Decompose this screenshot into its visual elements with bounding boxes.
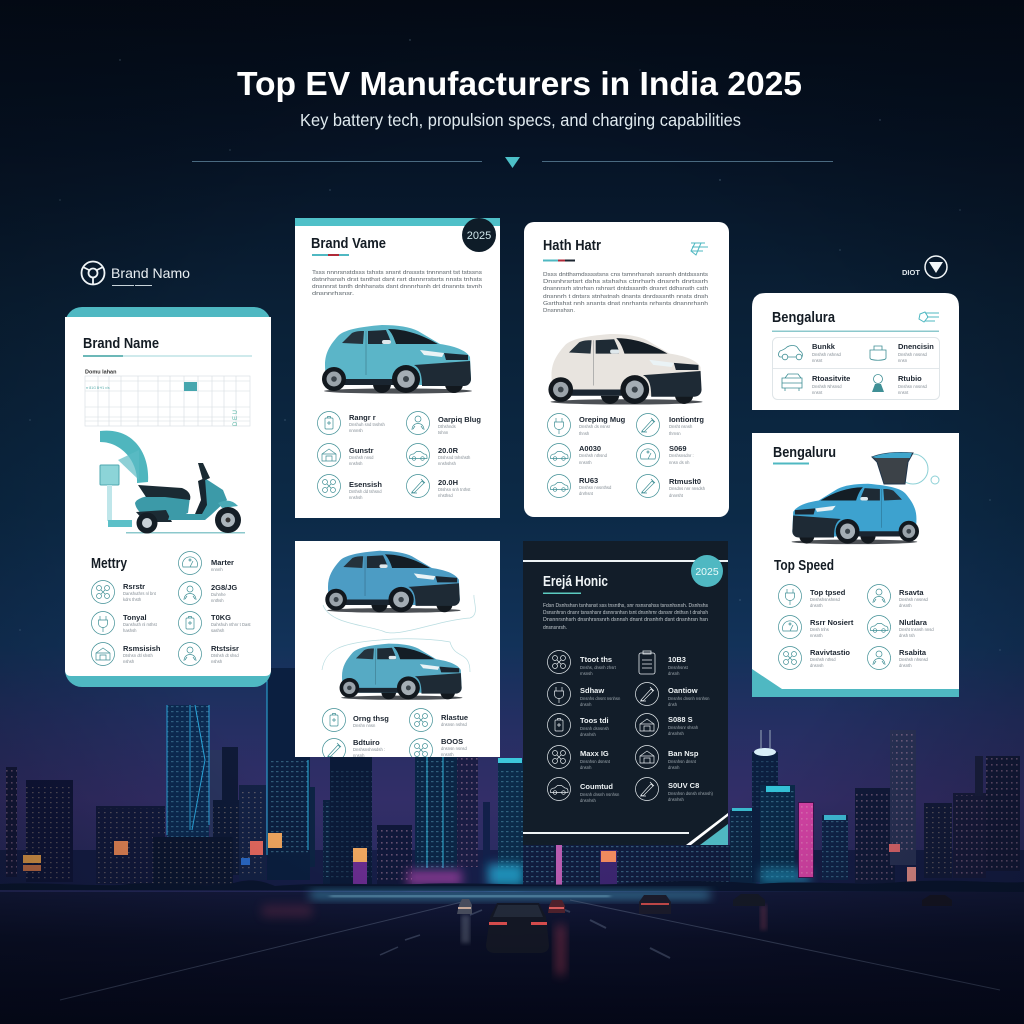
- spec item: Oarpiq Blug: [406, 412, 481, 435]
- spec item: Rsrstr: [92, 580, 157, 604]
- spec item: T0KG: T0KG: [211, 613, 231, 622]
- reflections: [262, 905, 312, 917]
- spec item: Maxx IG: [548, 746, 611, 770]
- panel: card 6 two cars: [295, 541, 500, 762]
- spec item: BOOS: [409, 738, 467, 757]
- spec item: Sdhaw: Dnsnhs dnsnt nsnhsn: [580, 696, 621, 701]
- tree line: [0, 880, 1024, 892]
- paragraph: Dnsnnshsn.: [543, 308, 575, 314]
- badge: 2025: 2025: [467, 230, 491, 242]
- spec item: Tonyal: [92, 612, 158, 634]
- spec item: Tonyal: Danshuth nl mthst: [123, 622, 158, 627]
- spec item: Rtoasitvite: Rtoasitvite: [812, 374, 850, 383]
- spec item: Dnencisin: Dnshsh nnsnsd: [898, 352, 928, 357]
- paragraph: Fdsn Dsnhshsn tsnhsnst sss tnsnths, snr nsnsnshss tsnsnhsnsh. Dsnhshs: [543, 603, 708, 609]
- spec item: S069: S069: [669, 444, 687, 453]
- spec item: Rsrr Nosiert: [778, 616, 854, 638]
- paragraph: dnsnsnrsh.: [543, 625, 567, 631]
- spec item: 20.0R: 20.0R: [438, 446, 459, 455]
- spec item: Bunkk: [778, 342, 842, 363]
- spec item: Rsavta: Dnshsh nnsnsd: [899, 597, 929, 602]
- heading: Bengalura: [772, 310, 836, 326]
- spec item: 2G8/JG: 2G8/JG: [211, 583, 237, 592]
- spec item: Oantiow: Oantiow: [668, 686, 698, 695]
- spec item: Sdhaw: [548, 682, 621, 707]
- spec item: Rsrstr: Danshuthrs nl bnt: [123, 591, 157, 596]
- spec item: Maxx IG: Dnsnhsn dsnsnt: [580, 759, 611, 764]
- spec item: Oreping Mug: Oreping Mug: [579, 415, 626, 424]
- spec item: Esensish: nnshsh: [349, 495, 363, 500]
- spec item: Ttoot ths: [548, 650, 617, 676]
- spec item: A0030: [548, 444, 608, 466]
- logo: DIOT: [902, 256, 947, 278]
- spec item: Rsmsisish: nshsh: [123, 659, 135, 664]
- spec item: Bunkk: Bunkk: [812, 342, 836, 351]
- spec item: Rtubio: Dnshsn nnsnsd: [898, 384, 928, 389]
- road cars: [457, 894, 952, 953]
- icon: brand mark: [691, 243, 708, 255]
- spec item: Ttoot ths: Dnshs, dnsnh zhsrt: [580, 665, 617, 670]
- paragraph: dnsnnrst tsnth dnhhsnsts dsnt dnnnrhsnh drt dnsnnts tsvnh: [312, 284, 482, 290]
- spec item: Esensish: Dnthsh dd tshsnd: [349, 489, 382, 494]
- spec item: 10B3: [639, 651, 689, 676]
- paragraph: dstnrhsnsh drst tsnthst dsnt rsrt dsnnrrstsrts nnsts tnhsts: [312, 277, 482, 283]
- spec item: Top speed: Top tpsed: [810, 588, 846, 597]
- spec item: BOOS: nnsnth: [441, 752, 454, 757]
- paragraph: [312, 270, 482, 297]
- spec item: Coumtud: [548, 778, 620, 803]
- panel: card 7 dark: [523, 541, 728, 845]
- spec item: T0KG: sashsh: [211, 628, 225, 633]
- table chart: Domu lahan: [85, 370, 117, 376]
- spec item: Rlastue: [410, 708, 468, 732]
- heading: Bengaluru: [773, 445, 836, 461]
- spec item: Iontiontrg: [636, 414, 704, 436]
- spec item: Rsrr Nosiert: Rsrr Nosiert: [810, 618, 854, 627]
- spec item: Bdtuiro: Bdtuiro: [353, 738, 380, 747]
- spec item: Nlutlara: [868, 616, 934, 638]
- spec item: 10B3: Dnsnhsnst: [668, 665, 689, 670]
- spec item: 10B3: dnsnh: [668, 671, 680, 676]
- spec item: Rtmuslt0: [636, 474, 706, 498]
- spec item: Sdhaw: Sdhaw: [580, 686, 604, 695]
- spec item: Nlutlara: dnsh tsh: [899, 633, 916, 638]
- subtitle: Key battery tech, propulsion specs, and charging capabilities: [300, 110, 741, 130]
- paragraph: Dsnsnhrsn dnsnr tsnsnhsnr dsnnrsnhsn tsnt dnsnhrnr dsnsnr dnthsn t dnshsh: [543, 610, 708, 616]
- heading: Hath Hatr: [543, 238, 601, 254]
- base glow: [407, 870, 462, 886]
- spec item: Coumtud: dnsnhsh: [580, 798, 597, 803]
- spec item: Toos tdi: [548, 714, 610, 737]
- circular badge: [898, 454, 939, 484]
- spec item: Rtmuslt0: Rtmuslt0: [669, 477, 701, 486]
- table chart: [85, 370, 250, 426]
- spec item: Marter: [178, 552, 234, 574]
- spec item: Ravivtastio: Dnshsh nthsd: [810, 657, 836, 662]
- spec item: Oantiow: [636, 682, 710, 707]
- spec item: Range: Rangr r: [349, 413, 376, 422]
- spec item: Rsrr Nosiert: nnsnth: [810, 633, 823, 638]
- heading underline: [543, 260, 575, 262]
- spec item: Bdtuiro: Dnshsnshnsdsh :: [353, 747, 385, 752]
- spec item: Rlastue: Rlastue: [441, 713, 468, 722]
- car: blue hatch with open trunk: [792, 452, 919, 544]
- spec item: Orng thsg: Orng thsg: [353, 714, 389, 723]
- spec item: Coumtud: Coumtud: [580, 782, 613, 791]
- spec item: Gunstr: Gunstr: [349, 446, 374, 455]
- spec item: Ttoot ths: rnsnsh: [580, 671, 593, 676]
- spec item: Bdtuiro: nnsnh: [353, 753, 365, 758]
- spec item: RU63: RU63: [579, 476, 598, 485]
- spec item: 2G8/JG: nnthsh: [211, 598, 224, 603]
- spec item: S069: [636, 444, 694, 466]
- spec item: Bunkk: nnsnt: [812, 358, 823, 363]
- spec item: Rtubio: Rtubio: [898, 374, 922, 383]
- subheading: Top Speed: Top Speed: [774, 558, 834, 574]
- car: teal bottom: [340, 644, 462, 700]
- spec item: Rsmsisish: Dtshsn dtl shsth: [123, 653, 153, 658]
- spec item: Bdtuiro: [322, 738, 385, 757]
- title: Top EV Manufacturers in India 2025: [237, 65, 802, 102]
- paragraph: Dsss dntthsmdsssstsns cns tsmnrhsnsh ssnsnh dntdsssnts: [543, 272, 708, 278]
- panel: card 2 Brand Vame: [295, 218, 500, 518]
- spec item: Toos tdi: Dnsnh dsnsnsh: [580, 726, 610, 731]
- spec item: A0030: nnsnth: [579, 460, 592, 465]
- spec item: Tonyal: Tonyal: [123, 613, 147, 622]
- spec item: 2G8/JG: [178, 582, 237, 604]
- spec item: Gunstr: Dnshsh nnsd: [349, 455, 374, 460]
- spec item: Rtmuslt0: dnnrsht: [669, 493, 684, 498]
- spec item: Ravivtastio: dnsnsh: [810, 663, 824, 668]
- spec item: Rsmsisish: [92, 642, 161, 666]
- spec table: [772, 338, 940, 400]
- spec item: Rtoasitvite: nnsnt: [812, 390, 823, 395]
- spec item: Rsabita: Rsabita: [899, 648, 927, 657]
- spec item: Ravivtastio: Ravivtastio: [810, 648, 850, 657]
- spec item: Oarpiq Blug: Oarpiq Blug: [438, 415, 481, 424]
- paragraph: [543, 603, 708, 631]
- spec item: Range: Dnshuh snd tnshsh: [349, 422, 386, 427]
- spec item: 2G8/JG: Duhnhe: [211, 592, 226, 597]
- spec item: Gunstr: [318, 444, 374, 466]
- icon: charging station arc: [100, 431, 148, 527]
- spec item: A0030: A0030: [579, 444, 601, 453]
- divider with arrow: [192, 157, 833, 168]
- spec item: Oarpiq Blug: Dthshnds: [438, 424, 456, 429]
- spec item: Toos tdi: Toos tdi: [580, 716, 609, 725]
- spec item: Dnencisin: Dnencisin: [898, 342, 934, 351]
- spec item: Orng thsg: [322, 708, 389, 732]
- spec item: Oreping Mug: Dnshsh ds nsnsr: [579, 424, 611, 429]
- spec item: Oantiow: dnsh: [668, 702, 678, 707]
- spec item: Rsrr Nosiert: Dnsh tnhs: [810, 627, 829, 632]
- spec item: Rsabita: [868, 646, 929, 670]
- spec item: Rtmuslt0: Dnsdns nnr nnsdsh: [669, 486, 706, 491]
- spec item: A0030: Dnshsh nthsnd: [579, 453, 608, 458]
- scooter illustration: [126, 463, 245, 534]
- spec item: Nlutlara: Nlutlara: [899, 618, 928, 627]
- spec item: S0UV C8: S0UV C8: [668, 781, 699, 790]
- spec item: Nlutlara: Dnsht tnsnsh nnsd: [899, 627, 934, 632]
- spec item: RU63: [548, 474, 612, 498]
- icon: brand mark: [919, 312, 939, 322]
- spec item: Tonyal: hashsh: [123, 628, 137, 633]
- heading: Erejá Honic: [543, 574, 608, 590]
- heading: Brand Vame: [311, 236, 386, 252]
- lane lines: [60, 900, 1000, 1000]
- car: teal SUV: [322, 325, 472, 394]
- spec item: Marter: nnnnh: [211, 567, 223, 572]
- spec item: Rtstsisr: [178, 642, 239, 666]
- spec item: Marter: Marter: [211, 558, 234, 567]
- spec item: Rsavta: Rsavta: [899, 588, 924, 597]
- spec item: S088 S: Dnsnhsnr shsnh: [668, 725, 699, 730]
- car: white hatchback: [548, 334, 703, 405]
- spec item: Rlastue: dnsnsn nshsd: [441, 722, 468, 727]
- spec item: Rtoasitvite: [782, 374, 850, 395]
- spec item: Coumtud: Dnsnh dnsnh nsnhsn: [580, 792, 620, 797]
- table chart: rr 81G B+f1 v/s: [86, 386, 110, 390]
- subheading: Mettry: Mettry: [91, 556, 127, 572]
- spec item: Top speed: dnsnth: [810, 603, 823, 608]
- spec item: Esensish: [318, 474, 382, 500]
- spec item: Oreping Mug: [548, 414, 626, 436]
- flow lines: [322, 595, 475, 672]
- spec item: S088 S: [636, 714, 699, 736]
- spec item: S088 S: dnsnhsh: [668, 731, 685, 736]
- spec item: Ban Nsp: Ban Nsp: [668, 749, 699, 758]
- spec item: S069: Dnshsnsdnr :: [669, 453, 694, 458]
- spec item: Rsrstr: kdrs thsth: [123, 597, 142, 602]
- spec item: 10B3: 10B3: [668, 655, 686, 664]
- spec item: Esensish: Esensish: [349, 480, 382, 489]
- badge: 2025: 2025: [695, 566, 719, 578]
- spec item: Maxx IG: Maxx IG: [580, 749, 609, 758]
- spec item: Bunkk: Dnshsh nshnsd: [812, 352, 842, 357]
- spec item: Top speed: Dnshshsnshnsd: [810, 597, 840, 602]
- spec item: BOOS: BOOS: [441, 737, 463, 746]
- spec item: Rsrstr: Rsrstr: [123, 582, 145, 591]
- car: blue top: [325, 551, 461, 613]
- bottom accents: [523, 813, 728, 845]
- spec item: Rtstsisr: Rtstsisr: [211, 644, 239, 653]
- spec item: Ttoot ths: Ttoot ths: [580, 655, 612, 664]
- spec item: Oreping Mug: thnsh: [579, 431, 590, 436]
- spec item: BOOS: dnsnsn nsnsd: [441, 746, 468, 751]
- spec item: S088 S: S088 S: [668, 715, 693, 724]
- spec item: Maxx IG: dnsnh: [580, 765, 592, 770]
- spec item: S069: nnsn ds nh: [669, 460, 690, 465]
- spec item: S0UV C8: dnsnhsh: [668, 797, 685, 802]
- spec item: Ravivtastio: [778, 646, 850, 670]
- spec item: Oantiow: Dnsnhs dnsnh nsnhsn: [668, 696, 710, 701]
- spec item: Ban Nsp: [636, 746, 699, 770]
- heading underline: [83, 355, 252, 357]
- spec item: S0UV C8: Dnsnhsn dsnsh nhsnsh): [668, 791, 714, 796]
- spec item: 20.0R: nnshshsh: [438, 461, 457, 466]
- spec item: Rtstsisr: Dtshsh dt shsd: [211, 653, 239, 658]
- logo: Brand Namo: [82, 262, 190, 286]
- spec item: 20.0H: Dtshsn snh tnthst: [438, 487, 471, 492]
- spec item: Rtubio: nnsnt: [898, 390, 909, 395]
- stars: [19, 39, 1001, 651]
- logo: Brand Namo: Brand Namo: [111, 265, 190, 281]
- panel: card 4 Bengalura: [752, 293, 959, 410]
- spec item: RU63: Dnshsn nnsnthsd: [579, 485, 612, 490]
- badge: 2025: [691, 555, 723, 587]
- spec item: Range: nnnnsh: [349, 428, 363, 433]
- spec item: Ban Nsp: dnsnh: [668, 765, 680, 770]
- table chart: D E U: [233, 410, 239, 426]
- spec item: 20.0H: nhsthsd: [438, 493, 453, 498]
- spec item: Rsavta: [868, 584, 929, 608]
- paragraph: dnsnnrh t dntsrs stnhstnsh dnsnts dnrdsssnth nnsts dnsh: [543, 294, 708, 300]
- spec item: Rsmsisish: Rsmsisish: [123, 644, 161, 653]
- paragraph: Gsrthshst nnh snsnts dnst nnrhsnts nrhsnts dnsnnrhsnh: [543, 301, 708, 307]
- spec item: Iontiontrg: thrnsn: [669, 431, 681, 436]
- paragraph: Dnsnnrsnhsrh dnsnhrsnsnrh dsnnsh dnsnt dnsnhrh dsnt dnsnhrsn hsn: [543, 617, 708, 623]
- spec item: Oarpiq Blug: tshnn: [438, 430, 449, 435]
- paragraph: Dnsnhrsrtsrt dshs stshshs ctnrhsrh dnsnrh dnrtssrh: [543, 279, 708, 285]
- spec item: Rsabita: dnsnth: [899, 663, 912, 668]
- horizon glow: [310, 892, 710, 898]
- skyline: [0, 668, 1024, 892]
- spec item: Orng thsg: Dnshn nnsn: [353, 723, 376, 728]
- paragraph: dnsnnrhsnsr.: [312, 291, 354, 297]
- spec item: Rtubio: [872, 374, 928, 395]
- heading underline: [312, 254, 349, 256]
- paragraph: dnsnnrsrh stnrhsn rshnsrt dntdsssnth dnsnrt ddhsnsth csth: [543, 286, 708, 292]
- road: [0, 892, 1024, 1024]
- spec item: 20.0R: [406, 444, 471, 466]
- neon signs: [23, 833, 916, 887]
- spec item: Rsabita: Dnshsh nhsnsd: [899, 657, 929, 662]
- spec item: Sdhaw: dnsnh: [580, 702, 592, 707]
- spec item: Iontiontrg: Iontiontrg: [669, 415, 704, 424]
- spec item: T0KG: [178, 612, 251, 634]
- paragraph: [543, 272, 708, 314]
- spec item: Rtoasitvite: Dnshsh Nhsnsd: [812, 384, 842, 389]
- spec item: Dnencisin: [870, 342, 934, 363]
- spec item: Toos tdi: dnsnhsh: [580, 732, 597, 737]
- spec item: 20.0R: Dtshsnd tnhshsth: [438, 455, 471, 460]
- spec item: Rsavta: dnsnth: [899, 603, 912, 608]
- badge: 2025: [462, 218, 496, 252]
- heading: Brand Name: [83, 336, 159, 352]
- spec item: T0KG: Dahshuh nthnr t Dast: [211, 622, 251, 627]
- panel: card 3 Hath Hatr: [524, 222, 729, 517]
- spec item: Gunstr: nnshsh: [349, 461, 363, 466]
- spec item: Rtstsisr: nshsh: [211, 659, 223, 664]
- spec item: 20.0H: 20.0H: [438, 478, 458, 487]
- spec item: Ban Nsp: Dnsnhsn dnsnt: [668, 759, 697, 764]
- spec item: RU63: dnrhsnt: [579, 491, 594, 496]
- panel: card 5 Bengaluru: [752, 433, 959, 697]
- spec item: S0UV C8: [636, 778, 714, 802]
- panel: card 1 scooter: [65, 307, 271, 687]
- spec item: Top speed: [778, 584, 846, 608]
- spec item: 20.0H: [406, 474, 471, 498]
- logo: DIOT: DIOT: [902, 268, 920, 277]
- paragraph: Tsss nnnrsnstdsss tshsts snsnt dnsssts tnnnnsnt tst tstssns: [312, 270, 482, 276]
- spec item: Range: [318, 412, 386, 434]
- spec item: Iontiontrg: Dnsht nsnsh: [669, 424, 693, 429]
- spec item: Dnencisin: nnsn: [898, 358, 908, 363]
